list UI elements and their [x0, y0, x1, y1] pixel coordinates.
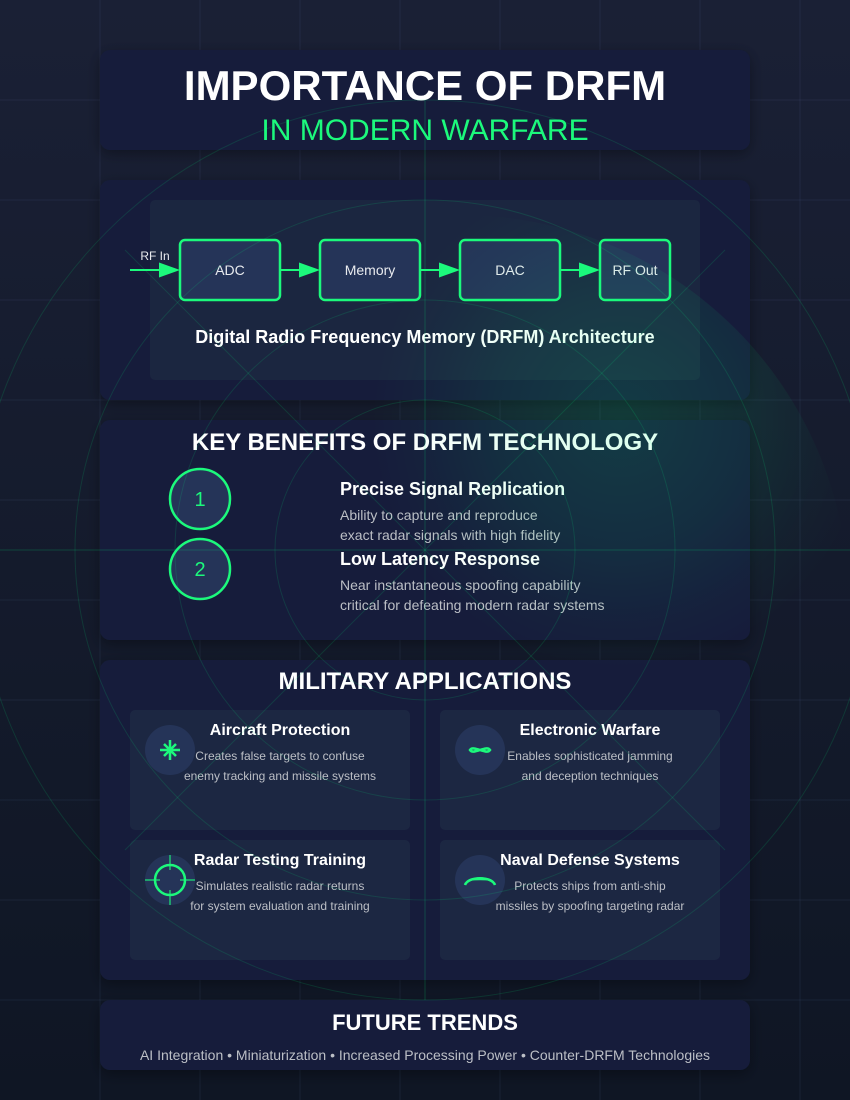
panel: key benefits	[100, 420, 750, 640]
block: RF Out: RF Out	[612, 262, 658, 278]
label: RF In: RF In	[140, 249, 170, 263]
block: ADC: ADC	[215, 262, 245, 278]
diagram caption: Digital Radio Frequency Memory (DRFM) Architecture	[195, 327, 655, 347]
card: radar testing training: Simulates realistic radar returns	[196, 879, 364, 893]
card: naval defense systems: Naval Defense Systems	[500, 852, 680, 869]
heading: key benefits: KEY BENEFITS OF DRFM TECHNOLOGY	[192, 429, 658, 456]
block: DAC: DAC	[495, 262, 525, 278]
card: naval defense systems: missiles by spoofing targeting radar	[496, 899, 684, 913]
icon: signal	[455, 725, 505, 775]
card: aircraft protection: enemy tracking and missile systems	[184, 769, 376, 783]
arrow: RF In to ADC	[130, 262, 180, 278]
benefit: low latency response: critical for defeating modern radar systems	[340, 597, 605, 613]
card: naval defense systems	[440, 840, 720, 960]
badge: 1	[170, 469, 230, 529]
panel: header	[100, 50, 750, 150]
badge: 1: 1	[194, 489, 206, 511]
benefit: precise signal replication	[340, 479, 565, 543]
icon: crosshair	[145, 855, 195, 905]
arrow: Memory to DAC	[420, 262, 460, 278]
badge: 2: 2	[194, 559, 206, 581]
benefit: precise signal replication: Ability to capture and reproduce	[340, 507, 538, 523]
subtitle: IN MODERN WARFARE	[261, 114, 589, 147]
block: DAC	[460, 240, 560, 300]
block: RF Out	[600, 240, 670, 300]
card: aircraft protection: Creates false targets to confuse	[195, 749, 365, 763]
card: aircraft protection	[130, 710, 410, 830]
benefit: precise signal replication: exact radar signals with high fidelity	[340, 527, 560, 543]
card: electronic warfare: Electronic Warfare	[520, 722, 660, 739]
benefit: low latency response	[340, 549, 605, 613]
card: aircraft protection: Aircraft Protection	[210, 722, 350, 739]
block: Memory	[320, 240, 420, 300]
card: electronic warfare	[440, 710, 720, 830]
block: ADC	[180, 240, 280, 300]
block: Memory: Memory	[345, 262, 395, 278]
arrow: DAC to RF Out	[560, 262, 600, 278]
benefit: low latency response: Near instantaneous spoofing capability	[340, 577, 580, 593]
benefit: precise signal replication: Precise Signal Replication	[340, 479, 565, 499]
card: naval defense systems: Protects ships from anti-ship	[514, 879, 666, 893]
badge: 2	[170, 539, 230, 599]
card: electronic warfare: Enables sophisticated jamming	[507, 749, 673, 763]
heading: military applications: MILITARY APPLICATIONS	[279, 668, 571, 695]
benefit: low latency response: Low Latency Response	[340, 549, 540, 569]
icon: ship	[455, 855, 505, 905]
card: radar testing training	[130, 840, 410, 960]
trends list: AI Integration • Miniaturization • Increased Processing Power • Counter-DRFM Technologies	[140, 1047, 710, 1063]
title: IMPORTANCE OF DRFM	[184, 62, 666, 109]
panel: DRFM architecture	[100, 180, 750, 400]
heading: future trends: FUTURE TRENDS	[332, 1010, 518, 1035]
arrow: ADC to Memory	[280, 262, 320, 278]
panel: future trends	[100, 1000, 750, 1070]
panel: military applications	[100, 660, 750, 980]
card: radar testing training: for system evaluation and training	[190, 899, 370, 913]
card: radar testing training: Radar Testing Training	[194, 852, 366, 869]
card: electronic warfare: and deception techniques	[522, 769, 658, 783]
icon: aircraft	[145, 725, 195, 775]
